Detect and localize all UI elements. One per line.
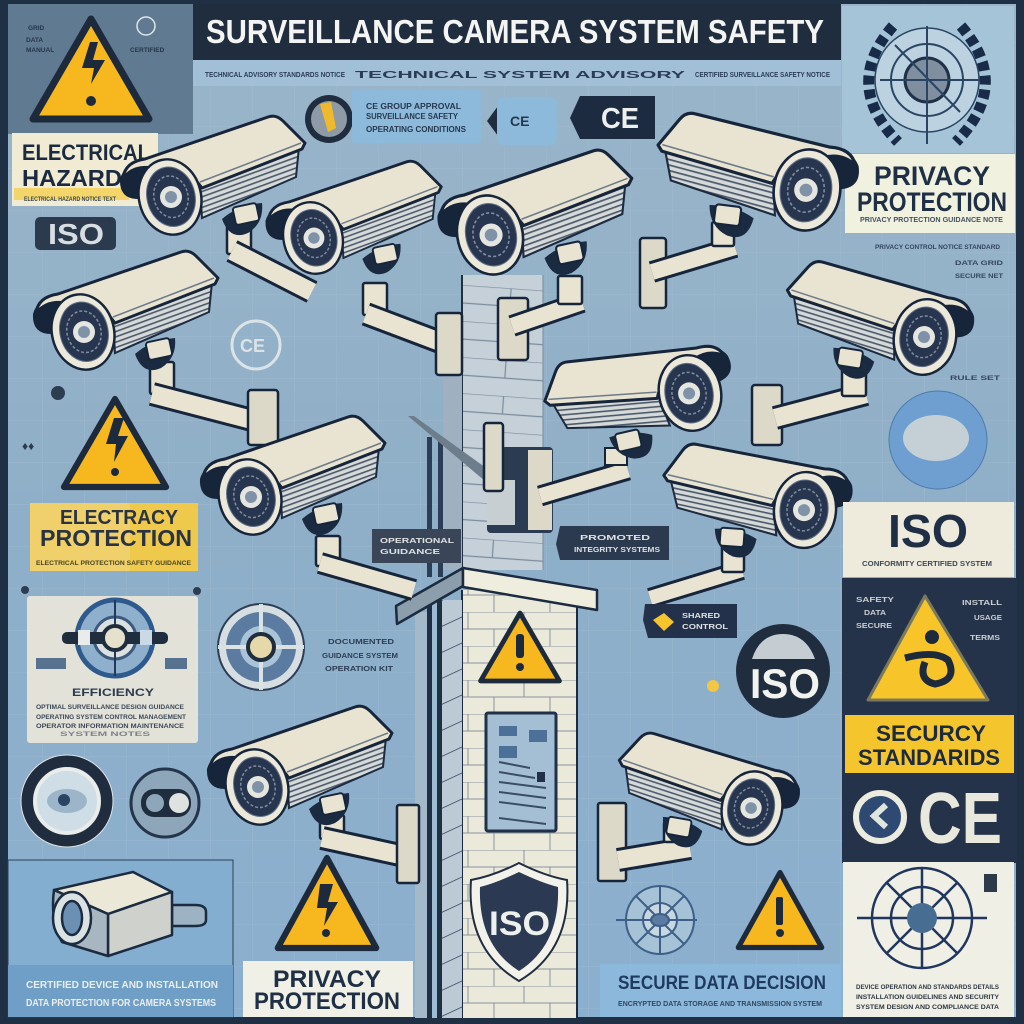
badge: ISO left: ISO	[48, 219, 104, 251]
tag right: PROMOTED	[580, 535, 650, 542]
icon: dial wheel	[218, 604, 304, 690]
camera 4	[656, 99, 863, 250]
text: camera caption: DATA PROTECTION FOR CAMERA SYSTEMS	[26, 998, 216, 1009]
camera 2 mount and wall bracket	[363, 283, 462, 375]
icon: warning triangle exclamation	[738, 872, 822, 948]
text: dial notes	[322, 637, 398, 673]
panel: efficiency notice: OPERATING SYSTEM CONTROL MANAGEMENT	[36, 715, 186, 721]
icon: pale circle seal: CE	[240, 336, 265, 356]
text: target notes: SYSTEM DESIGN AND COMPLIANCE DATA	[856, 1004, 999, 1011]
panel: electrical hazard label: ELECTRICAL HAZARD NOTICE TEXT	[24, 197, 116, 203]
security standards label: STANDARIDS	[858, 745, 1000, 770]
panel: privacy protection bottom label: PROTECTION	[254, 988, 400, 1015]
camera 6	[786, 254, 976, 388]
icon: electrical warning triangle	[33, 19, 149, 119]
camera 4 mount	[640, 222, 735, 308]
text: target notes	[856, 984, 1000, 1011]
subtitle strip: CERTIFIED SURVEILLANCE SAFETY NOTICE	[695, 72, 830, 79]
panel: privacy protection bottom label: PRIVACY	[273, 966, 381, 993]
text: dial notes: GUIDANCE SYSTEM	[322, 651, 398, 660]
small text on dark: DATA	[864, 610, 886, 617]
camera 11	[618, 728, 801, 856]
badge: ISO left	[35, 217, 116, 251]
panel: ISO right: ISO	[888, 505, 968, 557]
shield: ISO	[471, 863, 567, 981]
panel: privacy protection label	[845, 154, 1015, 233]
text: target notes: DEVICE OPERATION AND STANDARDS DETAILS	[856, 984, 1000, 991]
icon: crosshair dial	[36, 600, 187, 676]
panel: top-right emblem	[842, 6, 1014, 153]
text: dial notes: DOCUMENTED	[328, 637, 395, 646]
small glyph left	[21, 386, 201, 595]
camera 9 mount	[650, 546, 744, 598]
top badges	[305, 90, 655, 145]
panel: ISO right: CONFORMITY CERTIFIED SYSTEM	[862, 561, 992, 568]
title	[193, 4, 841, 60]
small text on dark: TERMS	[970, 635, 1000, 642]
camera 7 mount	[408, 416, 628, 533]
panel: privacy protection label: PRIVACY	[874, 161, 990, 191]
camera 3	[438, 150, 632, 282]
camera 1	[121, 116, 305, 241]
icon: wheel bottom centre	[616, 886, 697, 955]
text: target notes: INSTALLATION GUIDELINES AND SECURITY	[856, 994, 1000, 1001]
panel: efficiency notice: EFFICIENCY	[72, 687, 155, 699]
icon: round toggle seal	[131, 769, 199, 837]
panel: target notice	[843, 862, 1014, 1017]
info box: CE GROUP APPROVAL	[366, 102, 461, 111]
small text on dark: USAGE	[974, 615, 1002, 622]
icon: round seal left	[21, 755, 113, 847]
subtitle strip	[193, 60, 841, 86]
small notes right: PRIVACY CONTROL NOTICE STANDARD	[875, 244, 1000, 251]
small text: hazard notes	[26, 17, 165, 54]
icon: warning on column	[481, 613, 559, 681]
small text: hazard notes: MANUAL	[26, 47, 54, 54]
tag with yellow diamond: CONTROL	[682, 624, 729, 631]
info box	[352, 90, 481, 143]
icon: pale circle seal	[232, 321, 280, 369]
small text: hazard notes: CERTIFIED	[130, 47, 165, 54]
panel: electricity protection label: PROTECTION	[40, 525, 192, 551]
panel: ISO right	[843, 502, 1014, 577]
camera 1 mount	[227, 226, 312, 292]
panel: bottom-left camera	[8, 860, 233, 1017]
small notes right: DATA GRID	[955, 260, 1003, 267]
tag left: GUIDANCE	[380, 549, 441, 556]
icon: warning triangle bottom	[278, 858, 376, 948]
CE marks: CE	[918, 779, 1002, 859]
small dark tags centre	[372, 526, 737, 638]
subtitle strip: TECHNICAL SYSTEM ADVISORY	[355, 70, 686, 81]
panel: electricity protection label	[30, 503, 198, 571]
text: dial notes: OPERATION KIT	[325, 664, 393, 673]
tag right	[556, 526, 669, 560]
security standards label	[845, 715, 1014, 773]
info box: SURVEILLANCE SAFETY	[366, 112, 459, 121]
panel: security dark column	[842, 578, 1017, 863]
badge: CE dark	[570, 96, 655, 139]
small notes right: SECURE NET	[955, 273, 1003, 280]
tag left	[372, 529, 461, 563]
panel: efficiency notice: OPTIMAL SURVEILLANCE DESIGN GUIDANCE	[36, 705, 184, 711]
panel: privacy protection label: PRIVACY PROTECTION GUIDANCE NOTE	[860, 217, 1003, 224]
camera 5 mount	[150, 362, 278, 445]
panel: electrical hazard label: HAZARD	[22, 165, 122, 191]
CE marks	[856, 779, 1002, 859]
panel: secure data label	[600, 964, 841, 1017]
document panel	[486, 713, 556, 831]
tag with yellow diamond: SHARED	[682, 613, 720, 620]
badge: ISO circle	[736, 624, 830, 718]
tag left: OPERATIONAL	[380, 538, 455, 545]
small text on dark: SAFETY	[856, 597, 894, 604]
small notes right	[875, 244, 1003, 382]
tag right: INTEGRITY SYSTEMS	[574, 547, 660, 554]
camera 8	[201, 416, 385, 541]
panel: efficiency notice: SYSTEM NOTES	[60, 732, 150, 738]
icon: box camera	[53, 872, 206, 956]
small text on dark: SECURE	[856, 623, 892, 630]
camera 5	[34, 251, 218, 376]
camera 11 mount	[598, 803, 690, 881]
camera 9	[660, 423, 860, 573]
badge: round stone seal	[889, 391, 987, 489]
panel: electrical hazard label: ELECTRICAL	[22, 140, 150, 165]
security standards label: SECURCY	[876, 721, 986, 746]
brick column	[396, 275, 597, 1018]
icon: target	[857, 868, 987, 968]
panel: top-left hazard	[8, 4, 193, 134]
panel: efficiency notice	[27, 596, 198, 743]
small text: hazard notes: DATA	[26, 37, 43, 44]
panel: privacy protection bottom label	[243, 961, 413, 1017]
tag with yellow diamond	[643, 604, 737, 638]
camera 10	[208, 706, 392, 831]
icon: warning triangle left	[64, 399, 166, 487]
camera 8 mount	[316, 536, 414, 590]
panel: electricity protection label: ELECTRACY	[60, 507, 179, 529]
badge: CE dark: CE	[601, 103, 639, 135]
small text: hazard notes: GRID	[28, 25, 45, 32]
small glyph left: ♦♦	[22, 439, 34, 453]
text: camera caption: CERTIFIED DEVICE AND INSTALLATION	[26, 980, 218, 991]
camera 10 mount	[320, 805, 419, 883]
small notes right: RULE SET	[950, 375, 1000, 382]
small text on dark	[856, 597, 1003, 642]
camera 2	[266, 161, 441, 280]
panel: efficiency notice: OPERATOR INFORMATION MAINTENANCE	[36, 724, 184, 730]
badge: ISO circle: ISO	[750, 660, 820, 707]
panel: secure data label: ENCRYPTED DATA STORAGE AND TRANSMISSION SYSTEM	[618, 1001, 822, 1008]
small text on dark: INSTALL	[962, 600, 1003, 607]
title: SURVEILLANCE CAMERA SYSTEM SAFETY	[206, 13, 824, 50]
icon: warning triangle security	[868, 596, 988, 700]
info box: OPERATING CONDITIONS	[366, 125, 467, 134]
badge: hexagon seal	[487, 97, 557, 145]
panel: secure data label: SECURE DATA DECISION	[618, 973, 826, 994]
icon: round seal	[305, 95, 353, 143]
camera 3 mount	[498, 276, 582, 360]
text: camera caption	[26, 980, 218, 1009]
column base	[396, 568, 597, 1018]
panel: electrical hazard label	[12, 133, 158, 206]
shield: ISO: ISO	[489, 905, 550, 943]
camera 6 mount	[752, 368, 866, 445]
badge: hexagon seal: CE	[510, 113, 529, 129]
camera 7	[533, 299, 753, 490]
accent dot	[707, 680, 719, 692]
subtitle strip: TECHNICAL ADVISORY STANDARDS NOTICE	[205, 72, 345, 79]
panel: electricity protection label: ELECTRICAL PROTECTION SAFETY GUIDANCE	[36, 561, 191, 567]
